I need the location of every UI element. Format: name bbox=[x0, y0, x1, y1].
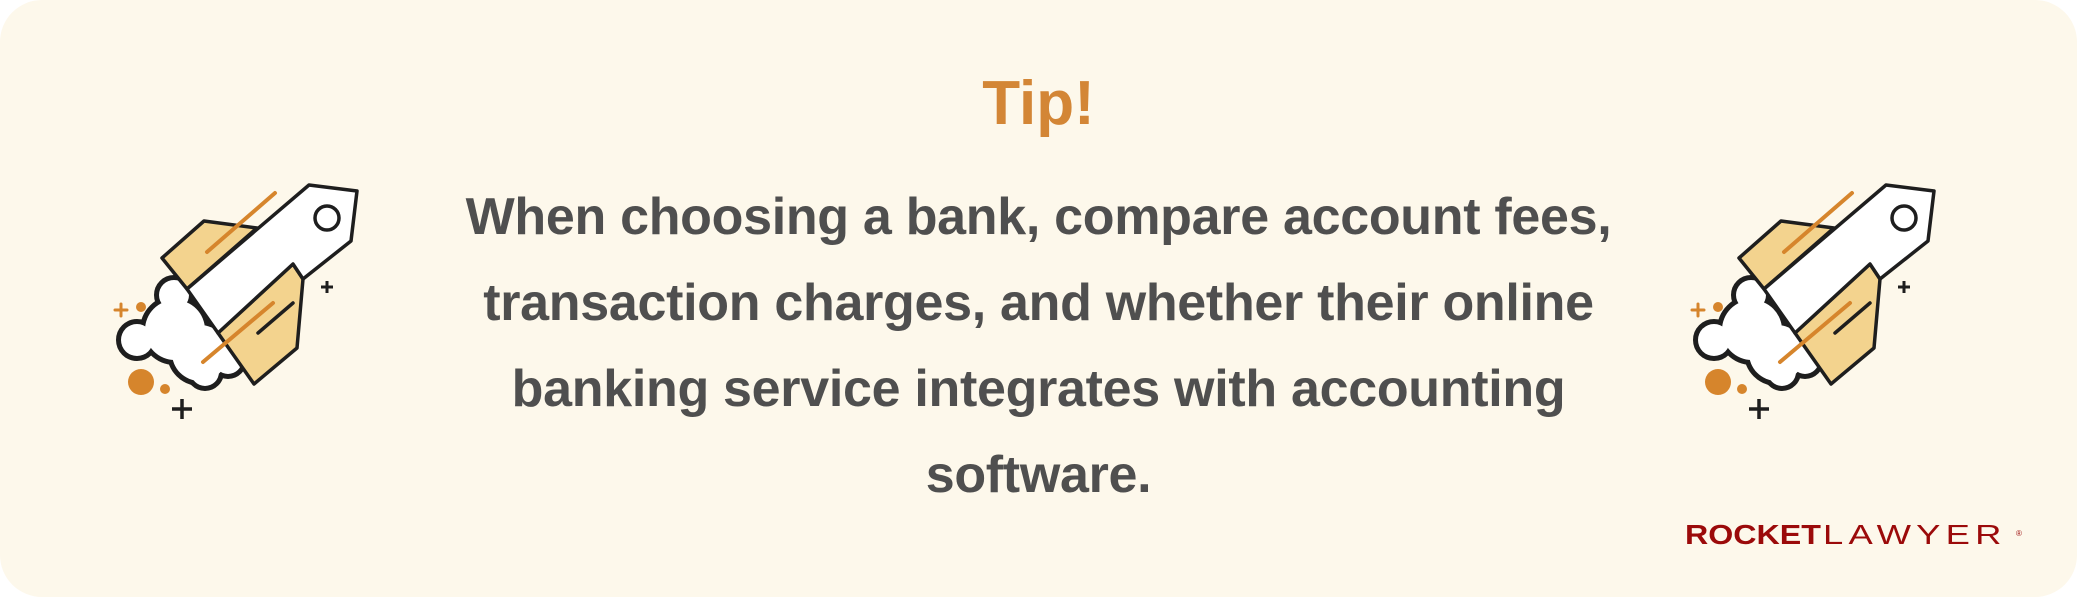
icon: left rocket bbox=[114, 183, 359, 419]
title: Tip! bbox=[982, 69, 1095, 138]
logo: Rocket Lawyer: ® bbox=[2016, 529, 2022, 538]
logo: Rocket Lawyer bbox=[1685, 519, 2022, 550]
logo: Rocket Lawyer: LAWYER bbox=[1823, 519, 2007, 550]
icon: right rocket bbox=[1690, 183, 1936, 419]
logo: Rocket Lawyer: ROCKET bbox=[1685, 519, 1821, 550]
text block: tip body: When choosing a bank, compare account fees, transaction charges, and whether their online banking service integrates with accounting software. bbox=[466, 188, 1611, 504]
